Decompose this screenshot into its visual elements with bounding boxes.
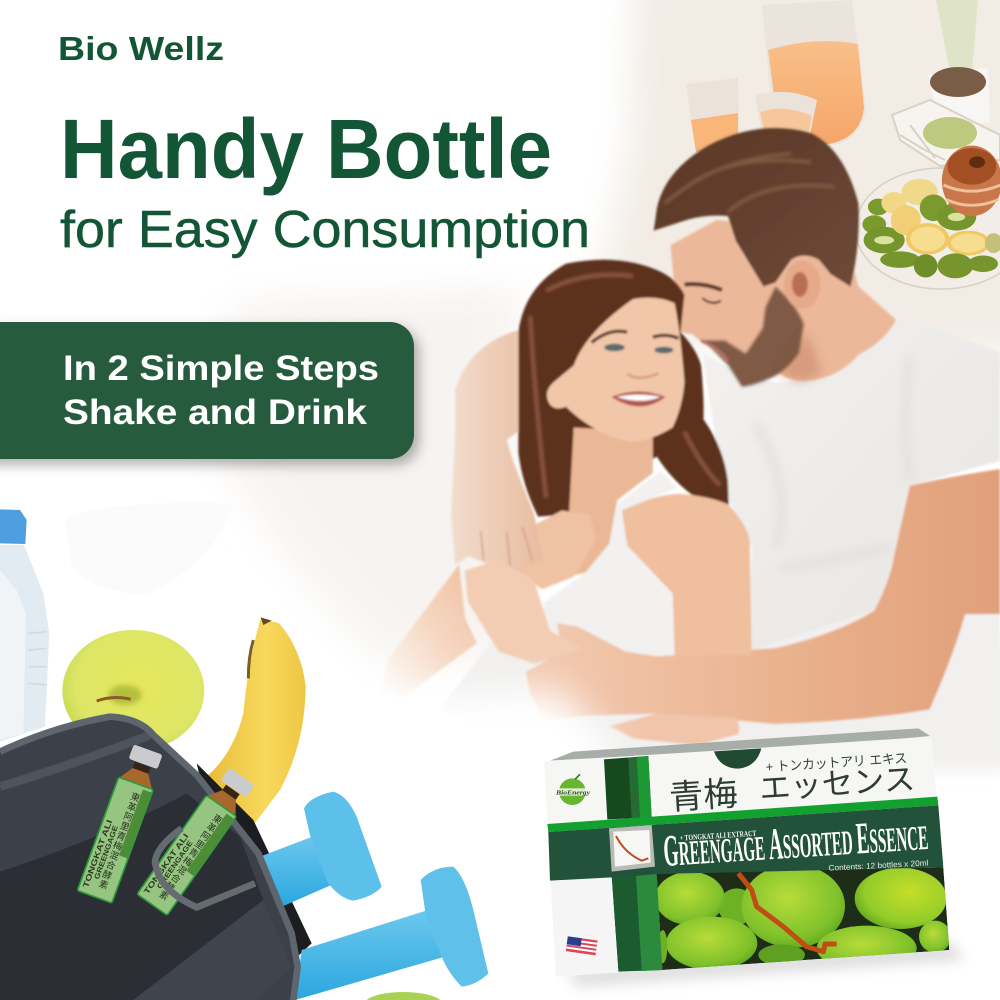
box face bbox=[544, 737, 949, 977]
woman's hand holding bbox=[465, 559, 582, 664]
soft fade under the couple bbox=[300, 690, 620, 1000]
title: Handy Bottle bbox=[60, 102, 552, 196]
vial label: TONGKAT ALI bbox=[81, 819, 114, 889]
woman's far arm fading left bbox=[380, 564, 477, 697]
couple in bed bbox=[380, 128, 1000, 750]
juice glass left bbox=[686, 78, 740, 152]
japanese subtitle: + トンカットアリ エキス bbox=[765, 751, 908, 775]
vial label: 東革阿里青梅混合酵素 bbox=[156, 811, 224, 902]
english product name: GREENGAGE ASSORTED ESSENCE bbox=[662, 809, 929, 876]
white fade between headline and photo bbox=[0, 0, 630, 300]
bag lower right panel bbox=[133, 900, 292, 1000]
vial label: GREENGAGE bbox=[155, 839, 195, 890]
water bottle bbox=[0, 509, 49, 742]
dumbbell bottom bbox=[295, 867, 488, 1000]
photo backdrop: bedroom wash bbox=[200, 0, 1000, 770]
man's hair highlights bbox=[665, 154, 835, 212]
woman's neck and chest bbox=[566, 428, 653, 577]
neck shadow bbox=[779, 332, 823, 382]
product vial left bbox=[77, 743, 165, 903]
kiwi and lemon slices bbox=[862, 179, 1000, 278]
vial label bbox=[137, 795, 236, 915]
bag zipper edge bbox=[0, 717, 298, 1000]
fruit plate bbox=[855, 146, 1000, 289]
woman's facial features bbox=[592, 331, 679, 406]
japanese kanji name: 青梅 bbox=[668, 775, 739, 817]
backpack bbox=[0, 715, 300, 1000]
juice pitcher bbox=[762, 0, 866, 147]
fruit panel bbox=[655, 864, 951, 971]
contents line: Contents: 12 bottles x 20ml bbox=[828, 858, 929, 873]
dark bag interior bbox=[197, 763, 312, 967]
box top flap bbox=[550, 728, 930, 761]
brand logo bbox=[555, 774, 590, 805]
dark green panel bbox=[548, 805, 943, 881]
vial label: GREENGAGE bbox=[92, 824, 120, 880]
shirt fold shadows bbox=[756, 357, 910, 568]
man's eye and brow bbox=[684, 284, 728, 361]
man's t-shirt bbox=[702, 316, 1000, 656]
juice glass right bbox=[755, 92, 817, 135]
brand logo: BioEnergy bbox=[555, 790, 590, 797]
dark green stripes upper left bbox=[604, 756, 652, 819]
callout: two simple steps bbox=[0, 322, 414, 459]
small apple at bottom edge bbox=[365, 992, 442, 1000]
green apple bbox=[62, 630, 204, 751]
woman's hair bbox=[518, 260, 729, 517]
brand name: Bio Wellz bbox=[58, 30, 224, 67]
banana bbox=[207, 617, 306, 835]
box shadow bbox=[567, 943, 963, 987]
breakfast table with juice and fruit bbox=[686, 0, 1000, 289]
white square root picture bbox=[609, 825, 655, 872]
lower dark stripes bbox=[612, 874, 662, 972]
vial label bbox=[77, 777, 153, 903]
product box bbox=[544, 728, 963, 987]
tongkat ali root bbox=[738, 873, 837, 952]
white basket with apple bbox=[892, 100, 1000, 166]
vial label: TONGKAT ALI bbox=[142, 832, 191, 896]
product vial right bbox=[137, 766, 257, 915]
pastry bbox=[942, 146, 1000, 216]
man's neck and face bbox=[671, 220, 896, 386]
finger lines bbox=[481, 527, 532, 568]
green band bbox=[547, 797, 938, 832]
bag pocket strip bbox=[0, 735, 150, 787]
dark green seal bbox=[714, 748, 761, 769]
man's hair bbox=[654, 128, 859, 287]
bed sheet right bbox=[439, 606, 1000, 750]
japanese katakana name: エッセンス bbox=[758, 762, 916, 806]
plant in white pot bbox=[928, 0, 990, 128]
woman's white top bbox=[542, 471, 677, 656]
callout line one: In 2 Simple Steps bbox=[63, 349, 379, 388]
tongkat ali extract line: + TONGKAT ALI EXTRACT bbox=[680, 829, 757, 843]
dumbbell top bbox=[260, 792, 382, 906]
woman's forearm under hand bbox=[609, 714, 739, 745]
man's ear bbox=[784, 260, 820, 309]
gym bag scene bbox=[0, 503, 488, 1000]
subtitle: for Easy Consumption bbox=[60, 201, 590, 259]
man's left arm and hand bbox=[451, 330, 543, 573]
man's beard bbox=[704, 287, 804, 387]
callout line two: Shake and Drink bbox=[63, 393, 368, 432]
bag strap loop bbox=[155, 828, 255, 907]
headline group bbox=[58, 30, 590, 259]
faint white pillow bbox=[65, 503, 233, 595]
man's right arm embracing bbox=[526, 469, 1000, 724]
woman's face bbox=[547, 298, 684, 442]
woman's hair highlight bbox=[530, 275, 720, 498]
woman's shoulder and arm bbox=[621, 494, 752, 656]
white lower left panel bbox=[551, 877, 618, 977]
woman's hand on chest bbox=[516, 510, 596, 589]
vial label: 東革阿里青梅混合酵素 bbox=[96, 790, 142, 891]
callout pill bbox=[0, 322, 414, 459]
bag lower dark panel bbox=[0, 793, 263, 1000]
malaysian flag bbox=[566, 936, 598, 955]
